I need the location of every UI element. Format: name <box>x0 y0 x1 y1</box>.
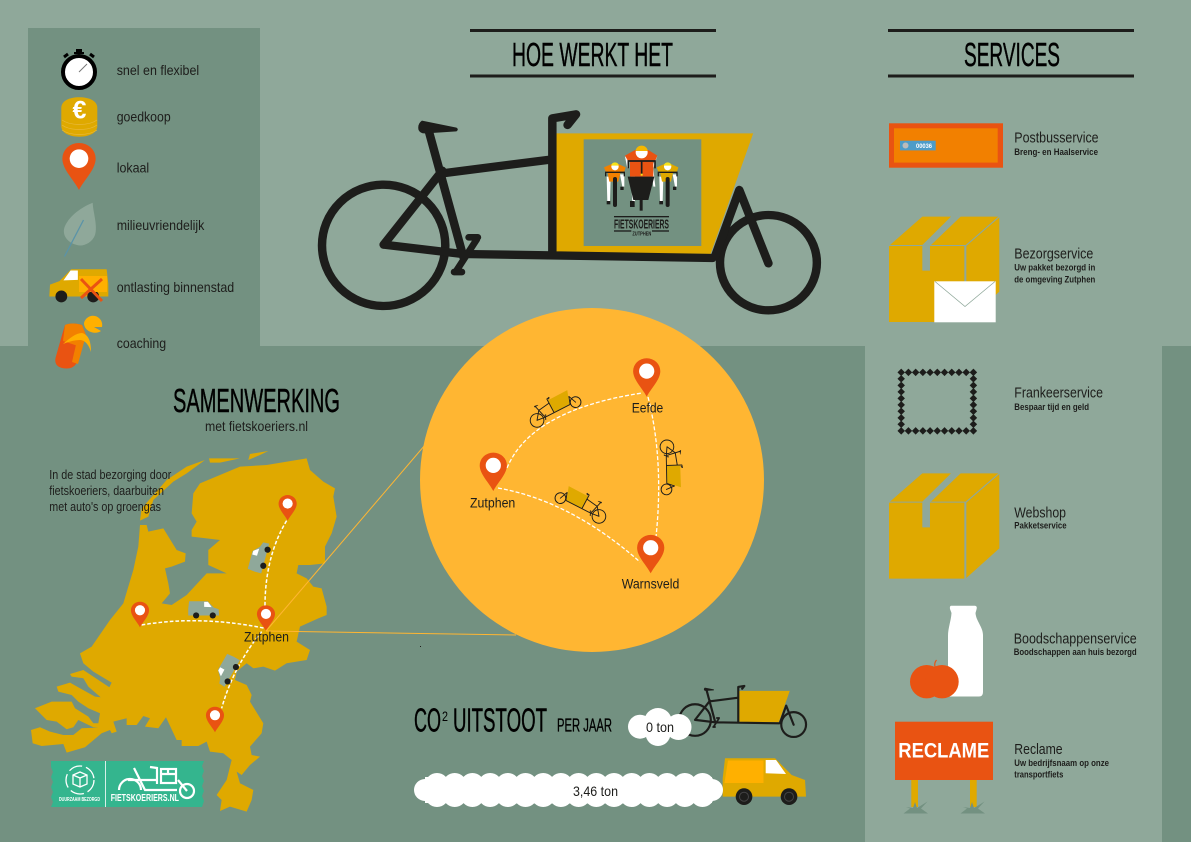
logo text <box>614 216 669 237</box>
service: bezorgservice: Uw pakket bezorgd in <box>1014 263 1095 274</box>
service: webshop: Pakketservice <box>1014 521 1067 532</box>
bike: eefde to warnsveld <box>659 439 683 495</box>
heading: co2 uitstoot per jaar: CO <box>414 702 441 739</box>
icon: crossed out van <box>49 269 108 302</box>
service: reclame: Uw bedrijfsnaam op onze <box>1014 758 1109 769</box>
routes <box>498 393 659 562</box>
label: warnsveld: Warnsveld <box>622 576 679 592</box>
cloud: 0 ton: 0 ton <box>646 719 674 735</box>
icon: location pin <box>62 143 96 190</box>
panel: right edge band <box>1162 346 1191 842</box>
service: bezorgservice: de omgeving Zutphen <box>1014 275 1095 286</box>
bike: zutphen to warnsveld <box>553 481 612 526</box>
pin: warnsveld <box>637 535 664 573</box>
icon: co2 bike <box>679 686 806 737</box>
routes <box>142 521 287 708</box>
heading: services: SERVICES <box>964 36 1060 73</box>
logo: fietskoeriers zutphen <box>584 139 701 246</box>
text: delivery explanation: In de stad bezorging door <box>49 467 172 482</box>
service: bezorgservice <box>889 217 1095 322</box>
panel: benefits legend <box>28 28 260 348</box>
service: frankeerservice <box>899 370 1103 434</box>
icon: milk bottle and apple <box>910 606 983 698</box>
service: boodschappenservice: Boodschappenservice <box>1014 630 1137 647</box>
pins <box>131 495 297 732</box>
label: zutphen: Zutphen <box>470 495 515 511</box>
text: lokaal: lokaal <box>117 160 149 176</box>
pin: eefde <box>633 358 660 397</box>
text: ontlasting binnenstad: ontlasting binnenstad <box>117 279 234 295</box>
icon: stopwatch <box>63 49 95 88</box>
pin: zutphen <box>480 453 507 491</box>
icon: parcel <box>889 473 999 579</box>
service: postbusservice <box>889 123 1099 168</box>
heading: hoe werkt het: HOE WERKT HET <box>512 36 673 73</box>
heading: co2 uitstoot per jaar: 2 <box>442 708 448 724</box>
logo: three cyclists <box>604 146 678 211</box>
icon: reclame sign: RECLAME <box>898 740 989 763</box>
service: webshop: Webshop <box>1014 504 1066 521</box>
text: delivery explanation <box>49 467 172 514</box>
text: coaching: coaching <box>117 335 166 351</box>
illustration: cargo bike <box>322 114 817 310</box>
icon: reclame sign <box>895 722 993 814</box>
map shape <box>31 451 337 812</box>
service: webshop <box>889 473 1067 579</box>
icon: mailbox <box>889 123 1003 168</box>
connector lines: map to circle <box>266 445 516 635</box>
circle: local route <box>420 308 764 652</box>
heading: co2 uitstoot per jaar: PER JAAR <box>557 716 612 736</box>
badge: duurzaam bezorgd fietskoeriers.nl: FIETSKOERIERS.NL <box>111 792 179 804</box>
label: zutphen on map: Zutphen <box>244 629 289 645</box>
subheading: met fietskoeriers.nl <box>205 418 308 434</box>
badge: duurzaam bezorgd fietskoeriers.nl <box>51 761 204 807</box>
icon: recycled parcel <box>66 766 94 794</box>
service: reclame: Reclame <box>1014 741 1063 758</box>
logo panel <box>584 139 701 246</box>
service: boodschappenservice: Boodschappen aan huis bezorgd <box>1014 647 1137 658</box>
service: frankeerservice: Bespaar tijd en geld <box>1014 402 1089 413</box>
map: netherlands <box>31 451 337 812</box>
cloud: 3,46 ton <box>414 777 723 803</box>
icon: parcel with envelope <box>889 217 999 322</box>
service: boodschappenservice <box>910 606 1137 698</box>
text: delivery explanation: met auto's op groengas <box>49 499 161 514</box>
label: eefde: Eefde <box>632 400 663 416</box>
icon: leaf <box>64 203 96 256</box>
icon: coach with backpack <box>55 316 102 368</box>
service: frankeerservice: Frankeerservice <box>1014 385 1103 402</box>
tiny dot <box>420 646 421 647</box>
legend: benefits list <box>49 49 234 368</box>
service: postbusservice: Breng- en Haalservice <box>1014 147 1098 158</box>
heading: samenwerking: SAMENWERKING <box>173 382 340 419</box>
vans <box>188 540 272 688</box>
icon: co2 van <box>723 758 806 805</box>
icon: coins: € <box>73 96 87 124</box>
heading: hoe werkt het <box>470 29 716 78</box>
bike: zutphen to eefde <box>524 385 583 430</box>
heading: services <box>888 29 1134 78</box>
logo text: ZUTPHEN <box>632 231 651 237</box>
panel: samenwerking band <box>0 346 865 842</box>
service: postbusservice: Postbusservice <box>1014 130 1099 147</box>
service: reclame <box>895 722 1109 814</box>
service: bezorgservice: Bezorgservice <box>1014 246 1093 263</box>
text: milieuvriendelijk: milieuvriendelijk <box>117 217 205 233</box>
text: snel en flexibel: snel en flexibel <box>117 62 199 78</box>
text: goedkoop: goedkoop <box>117 109 171 125</box>
cloud: 0 ton <box>628 708 692 746</box>
cloud: 3,46 ton: 3,46 ton <box>573 783 618 799</box>
service: reclame: transportfiets <box>1014 770 1063 781</box>
icon: coins <box>61 96 97 137</box>
text: delivery explanation: fietskoeriers, daarbuiten <box>49 483 164 498</box>
badge: duurzaam bezorgd fietskoeriers.nl: DUURZAAM BEZORGD <box>59 797 100 803</box>
heading: co2 uitstoot per jaar: UITSTOOT <box>453 702 547 739</box>
icon: white cargo bike <box>119 767 194 798</box>
icon: mailbox: 00036 <box>916 144 933 150</box>
icon: stamp <box>899 370 976 434</box>
logo text: FIETSKOERIERS <box>614 217 669 231</box>
